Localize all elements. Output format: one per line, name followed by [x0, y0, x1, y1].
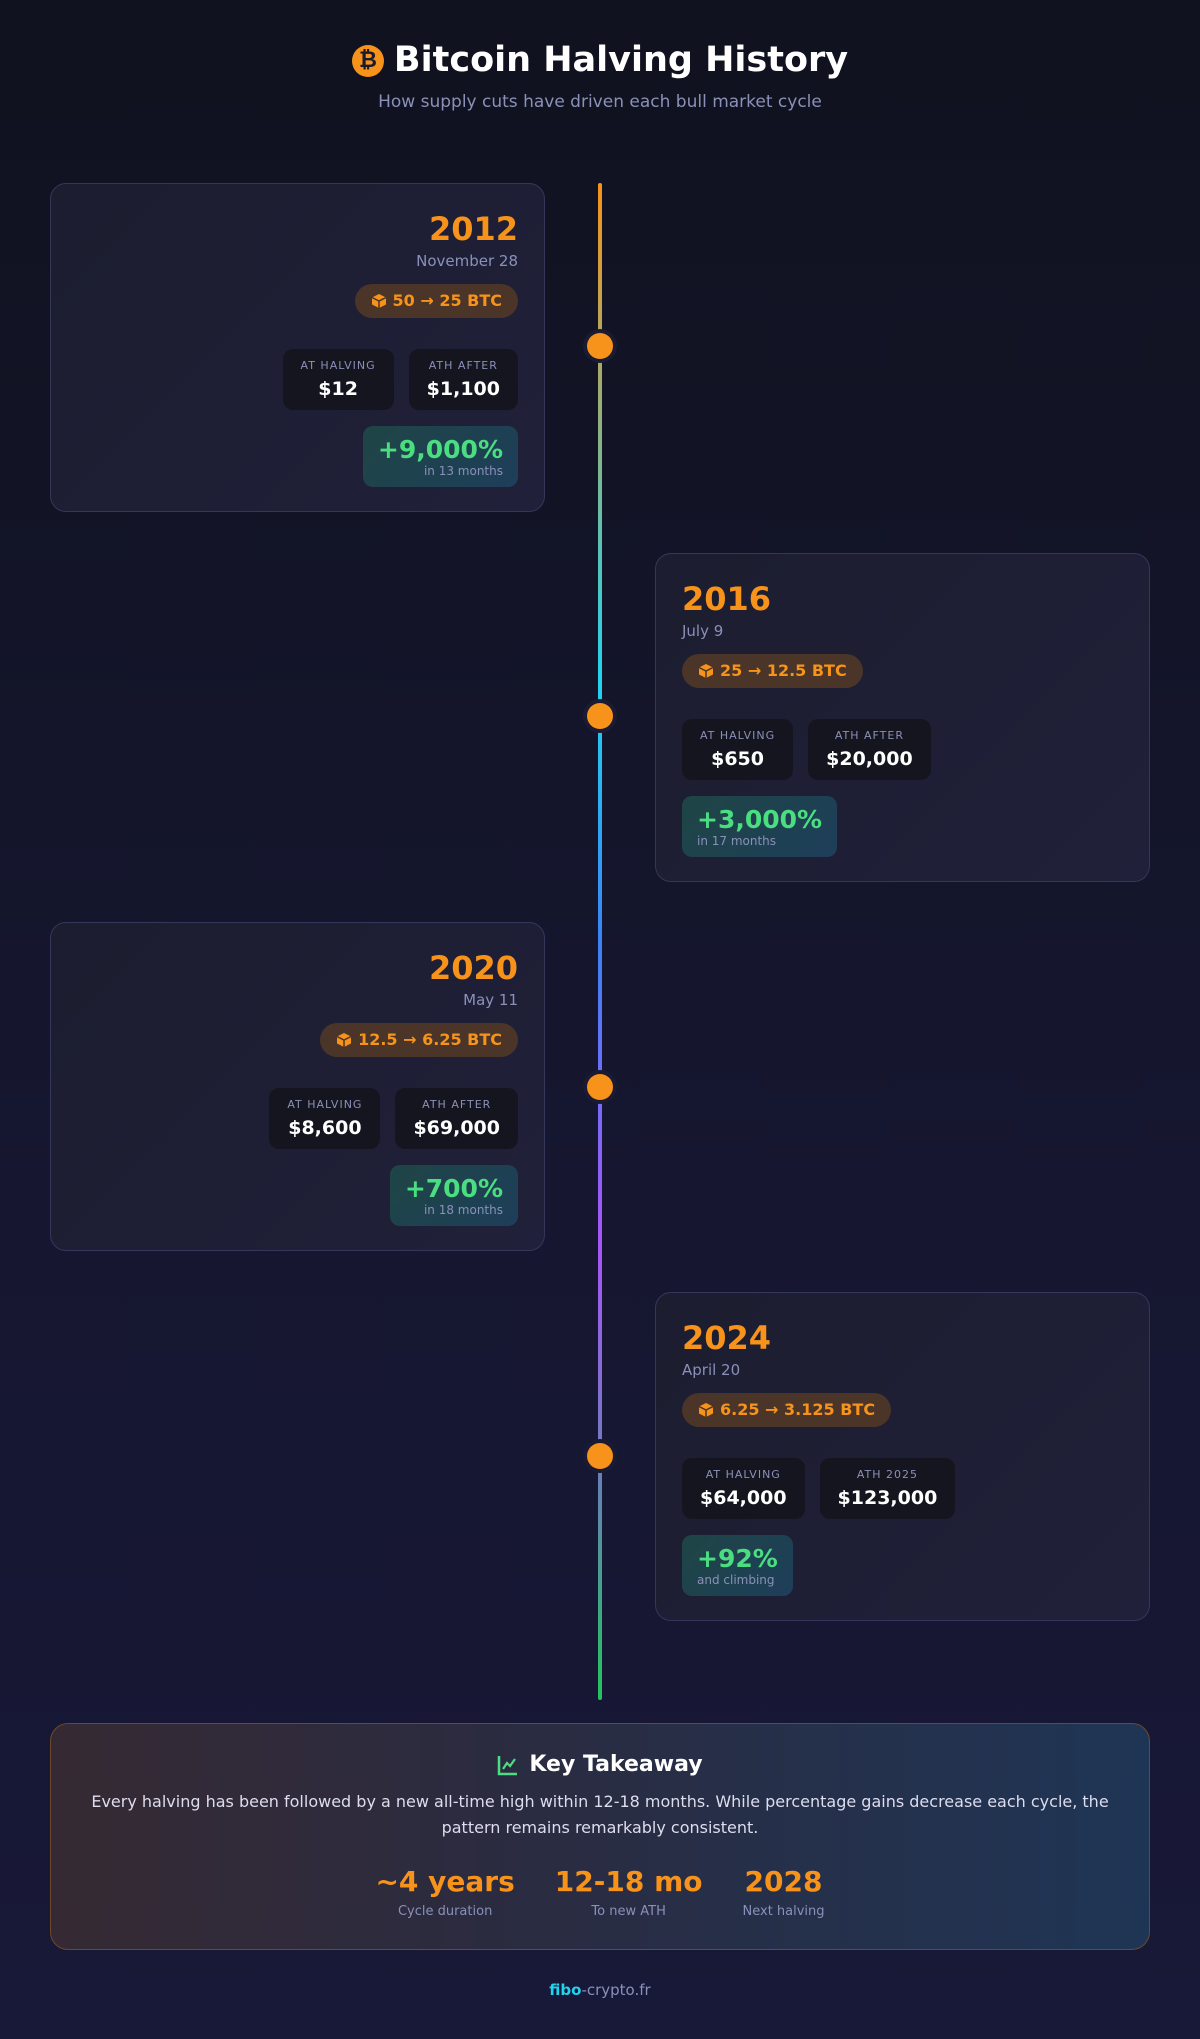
stats: ATH AFTER	[835, 729, 904, 742]
panel: 2024: 2024	[682, 1319, 771, 1357]
stats: $12	[318, 378, 358, 400]
stats: AT HALVING	[706, 1468, 781, 1481]
stats	[269, 1088, 518, 1149]
takeaway stats: Cycle duration	[398, 1904, 492, 1919]
takeaway stats: ~4 years	[375, 1865, 515, 1898]
panel: 2020: 2020	[429, 949, 518, 987]
gain	[682, 1535, 793, 1596]
gain: +9,000%	[378, 435, 503, 464]
gain: and climbing	[697, 1573, 775, 1587]
gain	[390, 1165, 518, 1226]
panel: key takeaway	[50, 1723, 1150, 1950]
reward pill: 25 → 12.5 BTC	[720, 661, 847, 680]
panel: 2024: April 20	[682, 1361, 740, 1379]
gain	[682, 796, 837, 857]
takeaway heading: Key Takeaway	[529, 1752, 703, 1777]
stats: $8,600	[288, 1117, 362, 1139]
title: Bitcoin Halving History	[394, 40, 848, 80]
stats: $69,000	[413, 1117, 500, 1139]
gain	[363, 426, 518, 487]
footer: fibo-crypto.fr	[549, 1981, 651, 1999]
gain: +92%	[697, 1544, 778, 1573]
takeaway stats: 2028	[745, 1865, 822, 1898]
stats: $123,000	[838, 1487, 937, 1509]
stats: ATH AFTER	[429, 359, 498, 372]
reward pill: 6.25 → 3.125 BTC	[720, 1400, 875, 1419]
panel: 2012: November 28	[416, 252, 518, 270]
timeline dot 2016	[587, 703, 613, 729]
reward pill: 12.5 → 6.25 BTC	[358, 1030, 502, 1049]
takeaway stats: Next halving	[742, 1904, 825, 1919]
gain: in 17 months	[697, 834, 776, 848]
stats	[682, 1458, 955, 1519]
takeaway stats	[375, 1865, 825, 1919]
stats: $64,000	[700, 1487, 787, 1509]
panel: 2016: July 9	[682, 622, 723, 640]
reward pill	[682, 1393, 891, 1427]
title: ₿	[359, 48, 377, 73]
stats: ATH AFTER	[422, 1098, 491, 1111]
reward pill	[354, 284, 518, 318]
timeline dot 2012	[587, 333, 613, 359]
reward pill	[682, 654, 863, 688]
takeaway stats: 12-18 mo	[555, 1865, 702, 1898]
gain: in 13 months	[424, 464, 503, 478]
timeline dot 2020	[587, 1074, 613, 1100]
stats: $1,100	[427, 378, 500, 400]
panel: 2020: May 11	[463, 991, 518, 1009]
stats: $650	[711, 748, 764, 770]
panel: 2024	[655, 1292, 1150, 1621]
subtitle: How supply cuts have driven each bull market cycle	[378, 92, 822, 112]
panel: 2016	[655, 553, 1150, 882]
panel: 2012: 2012	[429, 210, 518, 248]
stats	[682, 719, 931, 780]
gain: +3,000%	[697, 805, 822, 834]
takeaway text: Every halving has been followed by a new all-time high within 12-18 months. While percentage gains decrease each cycle, the pattern remains remarkably consistent.	[91, 1792, 1109, 1837]
reward pill	[320, 1023, 518, 1057]
takeaway stats: To new ATH	[591, 1904, 666, 1919]
stats: AT HALVING	[287, 1098, 362, 1111]
stats: ATH 2025	[857, 1468, 918, 1481]
stats: $20,000	[826, 748, 913, 770]
panel: 2012	[50, 183, 545, 512]
stats: AT HALVING	[700, 729, 775, 742]
timeline line	[598, 183, 602, 1700]
stats	[283, 349, 518, 410]
gain: in 18 months	[424, 1203, 503, 1217]
panel: 2020	[50, 922, 545, 1251]
gain: +700%	[405, 1174, 503, 1203]
panel: 2016: 2016	[682, 580, 771, 618]
reward pill: 50 → 25 BTC	[392, 291, 502, 310]
stats: AT HALVING	[301, 359, 376, 372]
timeline dot 2024	[587, 1443, 613, 1469]
